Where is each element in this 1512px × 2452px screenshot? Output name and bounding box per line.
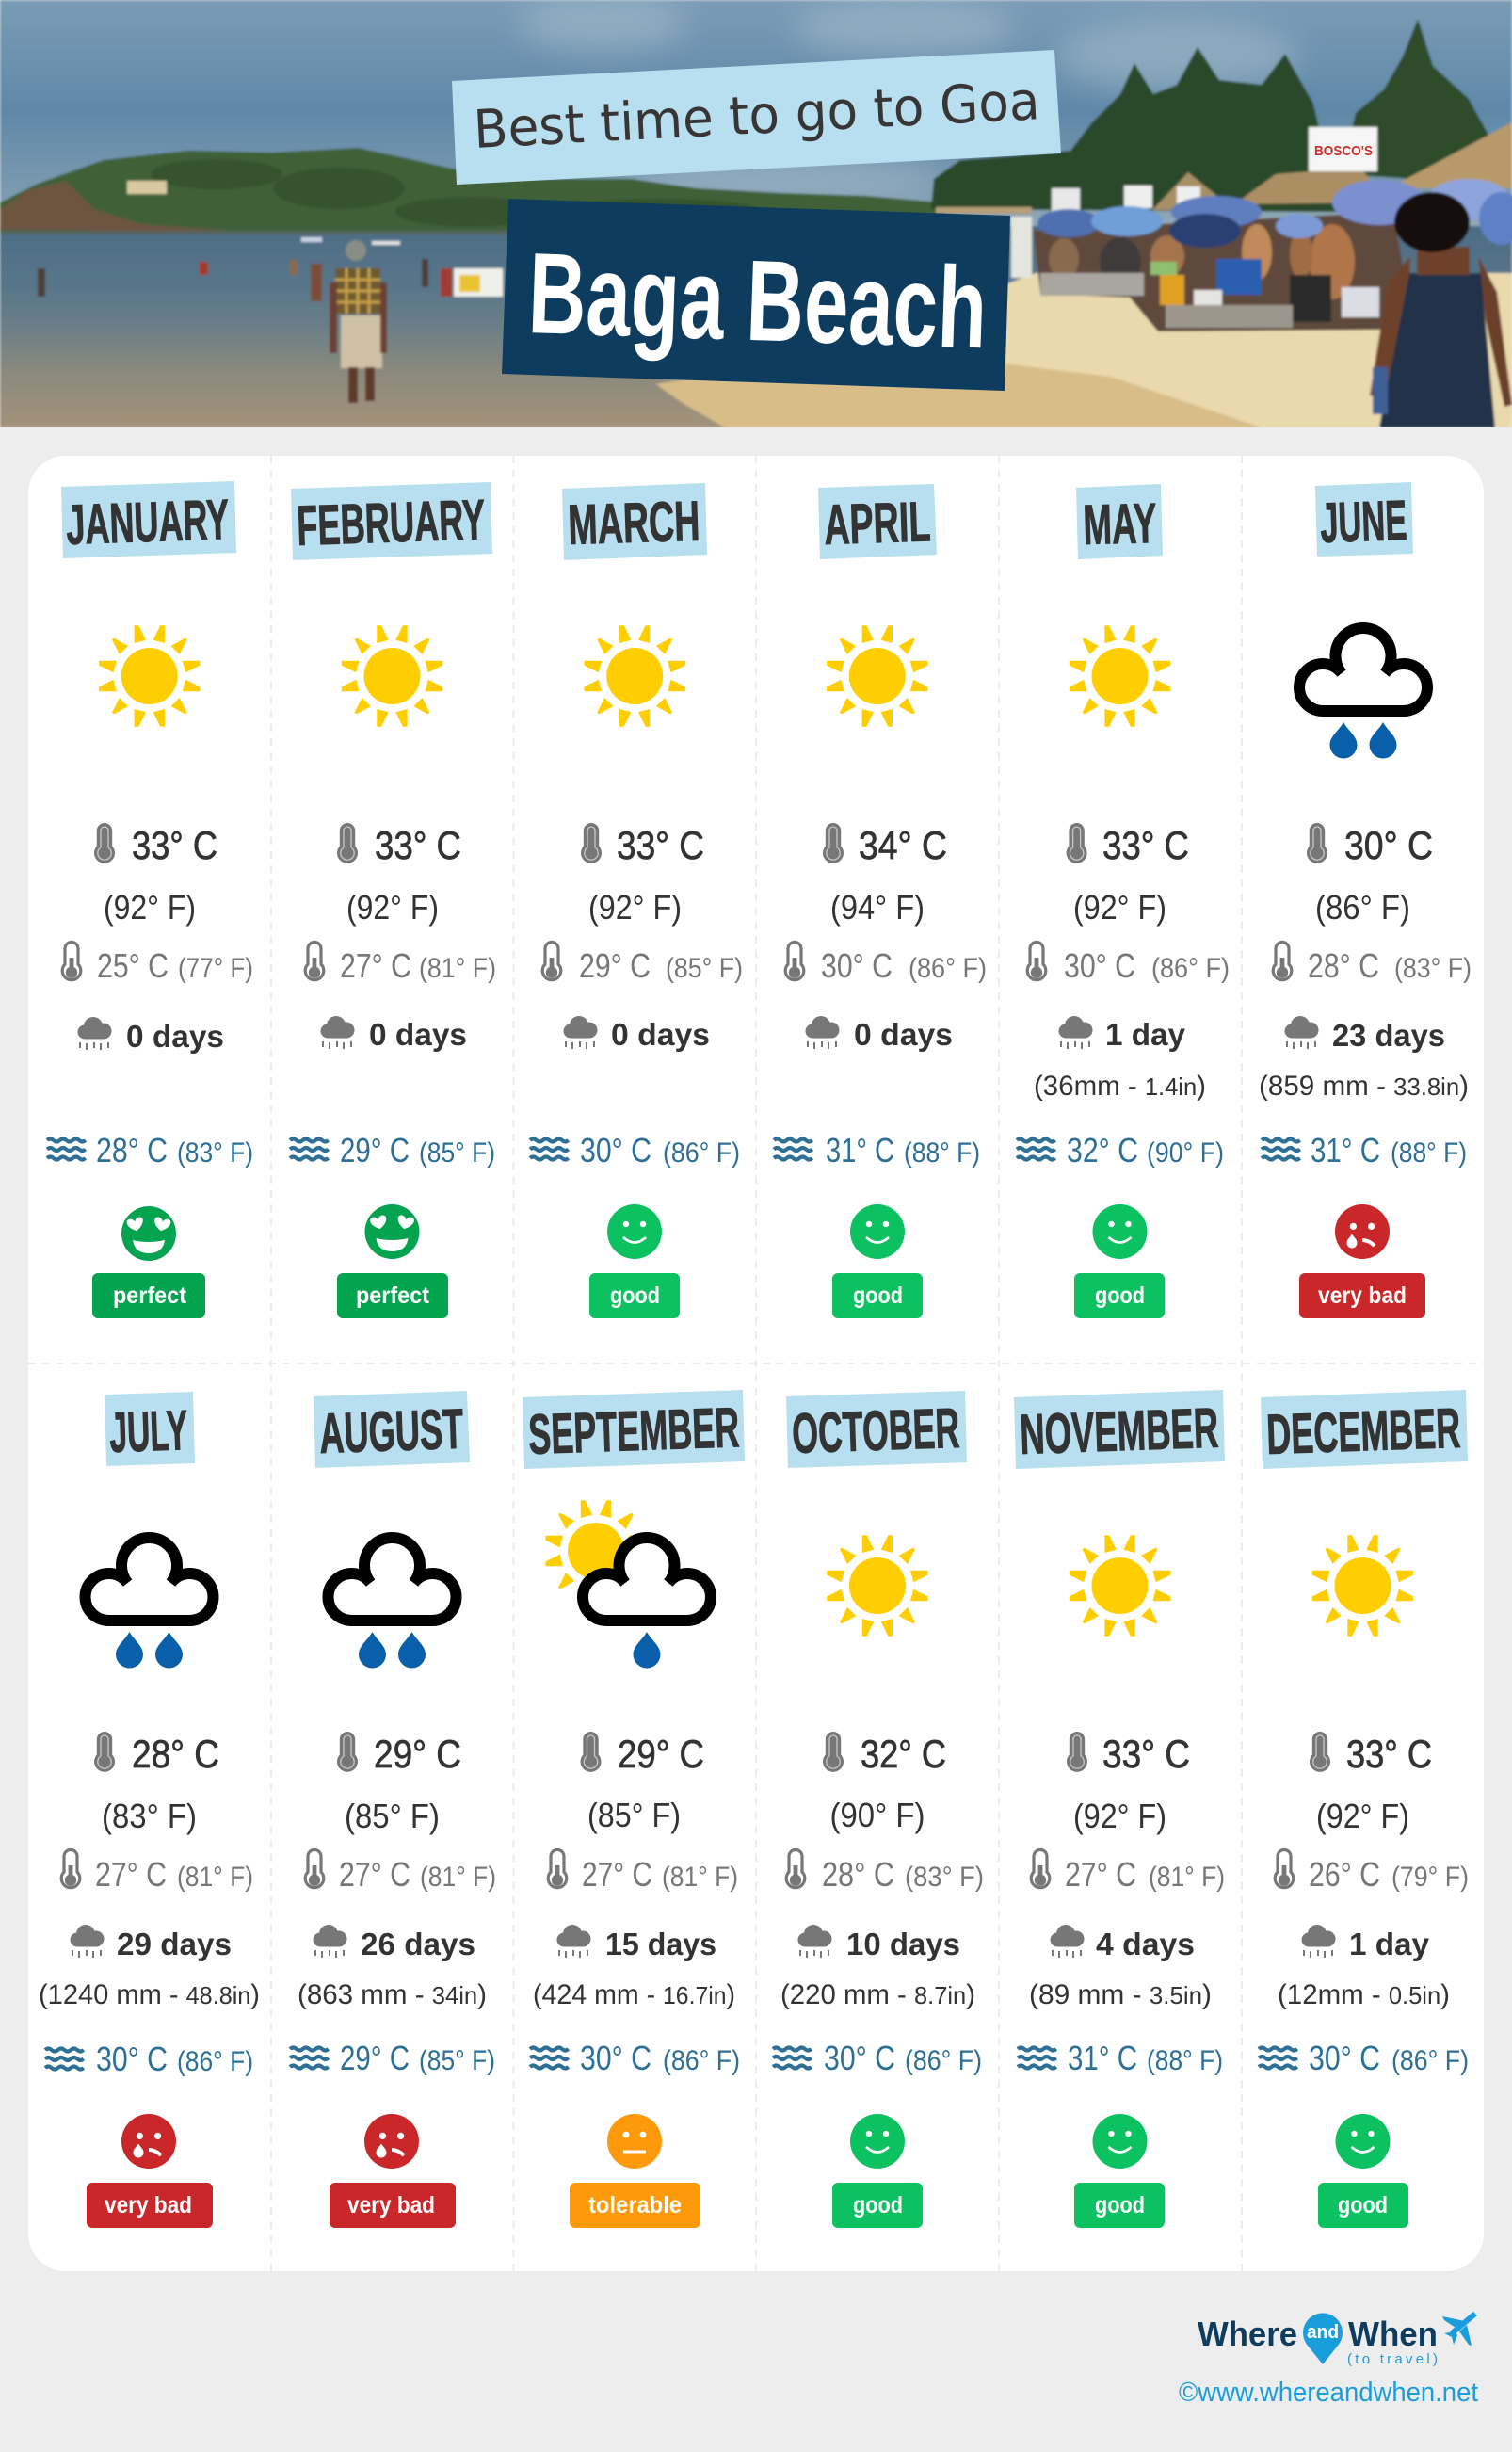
footer logo: Where and When: (to travel) [1347, 2351, 1438, 2367]
high temperature: (92° F) [1316, 1797, 1409, 1835]
rating: good [832, 2114, 923, 2228]
month label [1014, 1390, 1225, 1469]
sea temperature: 31° C [1311, 1131, 1380, 1170]
low temperature: 29° C [579, 946, 651, 985]
rating: perfect: perfect [113, 1282, 187, 1309]
sea temperature: 30° C [580, 1131, 651, 1170]
low temperature: 30° C [821, 946, 893, 985]
rainfall [533, 1925, 735, 2010]
hut roofs [1151, 171, 1218, 212]
rainfall [1278, 1925, 1450, 2010]
panel: December [1259, 1390, 1469, 2228]
sea temperature: 30° C [580, 2039, 651, 2077]
rating: very bad [330, 2114, 456, 2228]
sea temperature: (85° F) [419, 2045, 495, 2076]
sea temperature: 32° C [1067, 1131, 1138, 1170]
woman in the foreground [1370, 256, 1410, 399]
panel: April [774, 484, 987, 1318]
icon: sun [99, 625, 200, 727]
sea temperature [1262, 1131, 1467, 1170]
rating: perfect: perfect [356, 1282, 430, 1309]
low temperature: (81° F) [662, 1862, 738, 1893]
high temperature: (85° F) [587, 1796, 681, 1834]
panel: monthly calendar card [28, 456, 1484, 2271]
month label: MAY [1083, 492, 1157, 557]
icon: sun [827, 625, 928, 727]
sea temperature: 30° C [824, 2039, 895, 2077]
rating: very bad: very bad [1318, 1282, 1407, 1309]
rainfall: (859 mm - 33.8in) [1259, 1071, 1469, 1102]
high temperature: (92° F) [104, 888, 196, 927]
rainfall [1034, 1016, 1206, 1102]
low temperature: 27° C [339, 1855, 410, 1894]
high temperature: 30° C [1344, 823, 1433, 867]
man in the shallows [346, 240, 366, 261]
rainfall: (12mm - 0.5in) [1278, 1979, 1450, 2010]
rating: perfect [337, 1204, 448, 1318]
low temperature [785, 942, 987, 985]
low temperature: (85° F) [666, 953, 743, 984]
high temperature: 33° C [1102, 1732, 1190, 1776]
rating: good: good [1095, 1282, 1145, 1309]
sea temperature [1259, 2039, 1469, 2077]
sea temperature: (86° F) [663, 2045, 740, 2076]
sea temperature: 29° C [340, 1131, 410, 1170]
high temperature: 33° C [132, 823, 217, 867]
rating: perfect [92, 1206, 205, 1318]
icon: airplane [1442, 2314, 1475, 2346]
footer logo: Where and When: Where [1198, 2315, 1297, 2353]
rainfall [780, 1925, 975, 2010]
sea temperature [45, 2040, 253, 2078]
rating: good: good [1095, 2192, 1145, 2218]
rating: good: good [610, 1282, 660, 1309]
rating: very bad: very bad [347, 2192, 435, 2218]
panel: July [39, 1392, 260, 2228]
month label: FEBRUARY [296, 488, 486, 557]
panel: June [1259, 482, 1472, 1318]
rating: good [1074, 2114, 1165, 2228]
sea temperature: (86° F) [905, 2045, 982, 2076]
rainfall: (424 mm - 16.7in) [533, 1979, 735, 2010]
high temperature: (86° F) [1315, 888, 1410, 927]
month label [1315, 482, 1413, 557]
high temperature [337, 823, 461, 927]
icon: sun [827, 1535, 928, 1637]
rainfall: 1 day [1349, 1927, 1430, 1961]
high temperature: (92° F) [588, 888, 682, 927]
low temperature [305, 1849, 496, 1894]
sign text in photo: BOSCO'S [1314, 143, 1373, 159]
rainfall [77, 1017, 224, 1054]
panel: January [47, 481, 253, 1318]
rainfall: 0 days [611, 1017, 710, 1052]
title banner: Best time to go to Goa: Best time to go to Goa [472, 71, 1041, 161]
rating: good [1074, 1204, 1165, 1318]
month label [105, 1392, 195, 1466]
low temperature: (81° F) [419, 953, 496, 984]
rating: good [832, 1204, 923, 1318]
high temperature: 29° C [374, 1732, 461, 1776]
low temperature [305, 942, 496, 985]
rating: good: good [1338, 2192, 1388, 2218]
month label [523, 1390, 745, 1469]
sea temperature [1017, 1131, 1224, 1170]
high temperature: (92° F) [1073, 1797, 1166, 1835]
panel: March [530, 483, 743, 1318]
low temperature: (81° F) [1149, 1862, 1225, 1893]
rainfall [298, 1925, 487, 2010]
panel: September [523, 1390, 745, 2228]
rating: tolerable [570, 2114, 700, 2228]
sea temperature: (86° F) [1391, 2045, 1469, 2076]
rainfall: 29 days [117, 1927, 232, 1961]
month label [291, 482, 492, 560]
low temperature: 25° C [97, 946, 169, 985]
low temperature: 27° C [582, 1855, 652, 1894]
sea temperature: (86° F) [177, 2046, 253, 2077]
high temperature [1067, 1732, 1190, 1835]
high temperature [1067, 823, 1189, 927]
footer logo: Where and When: and [1307, 2322, 1339, 2343]
month label: MARCH [567, 490, 700, 557]
month label: AUGUST [318, 1397, 464, 1465]
sea temperature: (88° F) [1147, 2045, 1223, 2076]
rating: good [589, 1204, 680, 1318]
sea temperature: 31° C [1068, 2039, 1137, 2077]
month label [314, 1391, 470, 1468]
low temperature: (86° F) [1151, 953, 1230, 984]
low temperature [548, 1849, 738, 1894]
rainfall: (1240 mm - 48.8in) [39, 1979, 260, 2010]
month label: JANUARY [65, 488, 230, 557]
sea temperature [530, 2039, 740, 2077]
icon: sun [1312, 1535, 1413, 1637]
panel: May [1017, 484, 1230, 1318]
high temperature: (92° F) [346, 888, 439, 927]
icon: sun [584, 625, 685, 727]
high temperature [823, 823, 947, 927]
rating: good: good [853, 1282, 903, 1309]
rainfall [1029, 1925, 1212, 2010]
high temperature [94, 823, 217, 927]
rating: very bad [1299, 1204, 1425, 1318]
title banner: Baga Beach: Baga Beach [526, 229, 989, 372]
month label [562, 483, 707, 560]
low temperature: (79° F) [1391, 1862, 1469, 1893]
rainfall: 23 days [1332, 1018, 1445, 1053]
panel: August [290, 1391, 496, 2228]
trees [931, 47, 1337, 212]
icon: sun [342, 625, 442, 727]
rainfall: 4 days [1096, 1927, 1195, 1961]
low temperature: 27° C [1065, 1855, 1136, 1894]
high temperature [337, 1732, 461, 1835]
sea temperature [530, 1131, 740, 1170]
sea temperature: 30° C [96, 2040, 168, 2078]
title banner: Best time to go to Goa [452, 50, 1061, 185]
title banner: Baga Beach [502, 199, 1010, 391]
high temperature: (92° F) [1073, 888, 1166, 927]
high temperature: (83° F) [102, 1797, 197, 1835]
low temperature: 28° C [1308, 946, 1379, 985]
rainfall [563, 1016, 710, 1052]
high temperature [581, 823, 704, 927]
header photo: Baga Beach scene [0, 0, 1512, 427]
rainfall [39, 1925, 260, 2010]
rating: good: good [853, 2192, 903, 2218]
month label: JUNE [1319, 489, 1407, 555]
high temperature: 34° C [859, 823, 947, 867]
sea temperature: 30° C [1309, 2039, 1380, 2077]
low temperature [1273, 942, 1472, 985]
icon: sun [1070, 1535, 1170, 1637]
rainfall: 10 days [846, 1927, 960, 1961]
footer logo: Where and When [1198, 2313, 1475, 2367]
sea temperature: (85° F) [419, 1137, 495, 1169]
rainfall: 15 days [605, 1927, 716, 1961]
rainfall: (89 mm - 3.5in) [1029, 1979, 1212, 2010]
low temperature [1031, 1849, 1225, 1894]
icon: rain cloud with two drops [1299, 628, 1427, 759]
icon: map pin [1303, 2313, 1343, 2364]
sea temperature: (90° F) [1147, 1137, 1224, 1169]
icon: rain cloud with two drops [328, 1538, 456, 1669]
month label [61, 481, 236, 558]
low temperature: (83° F) [1394, 953, 1472, 984]
month label: SEPTEMBER [527, 1395, 740, 1466]
sea temperature: 31° C [826, 1131, 894, 1170]
rainfall [1259, 1016, 1469, 1102]
high temperature: (94° F) [830, 888, 925, 927]
sea temperature [290, 2039, 495, 2077]
low temperature: (81° F) [177, 1862, 253, 1893]
high temperature: 28° C [132, 1732, 219, 1776]
low temperature [62, 942, 253, 985]
month label: NOVEMBER [1019, 1396, 1219, 1466]
month label: APRIL [823, 490, 931, 557]
rainfall: 0 days [369, 1017, 467, 1052]
low temperature: 27° C [340, 946, 411, 985]
sea temperature: (86° F) [663, 1137, 740, 1169]
high temperature [94, 1732, 219, 1835]
high temperature: 29° C [618, 1732, 704, 1776]
month label [786, 1391, 967, 1468]
rainfall [320, 1016, 467, 1052]
high temperature [823, 1732, 946, 1834]
website credit: ©www.whereandwhen.net [1179, 2378, 1478, 2408]
sea temperature: 29° C [340, 2039, 410, 2077]
low temperature: 26° C [1309, 1855, 1380, 1894]
rainfall: (220 mm - 8.7in) [780, 1979, 975, 2010]
rainfall: (36mm - 1.4in) [1034, 1071, 1206, 1102]
month label [818, 484, 937, 559]
rainfall: 26 days [361, 1927, 475, 1961]
rainfall: (863 mm - 34in) [298, 1979, 487, 2010]
sea temperature [290, 1131, 495, 1170]
high temperature: 33° C [1346, 1732, 1432, 1776]
month label [1076, 484, 1163, 559]
sea temperature: (88° F) [1391, 1137, 1467, 1169]
sea temperature: (83° F) [177, 1137, 253, 1169]
low temperature: (81° F) [420, 1862, 496, 1893]
low temperature [786, 1849, 984, 1894]
sea temperature [47, 1131, 253, 1170]
high temperature: (90° F) [830, 1796, 925, 1834]
low temperature [61, 1849, 253, 1894]
panel: November [1014, 1390, 1225, 2228]
high temperature [580, 1732, 704, 1834]
month label: OCTOBER [791, 1396, 960, 1465]
icon: rain cloud with two drops [85, 1538, 213, 1669]
high temperature: 33° C [1102, 823, 1189, 867]
low temperature: 30° C [1064, 946, 1135, 985]
panel: October [773, 1391, 984, 2228]
low temperature: 28° C [822, 1855, 894, 1894]
high temperature [1307, 823, 1433, 927]
umbrellas [1037, 209, 1100, 237]
sea temperature [773, 2039, 982, 2077]
low temperature: (86° F) [909, 953, 987, 984]
rating: very bad: very bad [105, 2192, 192, 2218]
sea temperature [774, 1131, 980, 1170]
high temperature: 33° C [617, 823, 704, 867]
sea temperature: 28° C [96, 1131, 168, 1170]
low temperature: 27° C [95, 1855, 167, 1894]
high temperature: 32° C [861, 1732, 946, 1776]
month label: JULY [108, 1398, 188, 1464]
rating: very bad [87, 2114, 213, 2228]
footer logo: Where and When: When [1348, 2315, 1438, 2353]
low temperature [1027, 942, 1230, 985]
sea temperature: (88° F) [904, 1137, 980, 1169]
high temperature: 33° C [375, 823, 461, 867]
low temperature [1275, 1849, 1469, 1894]
panel: February [290, 482, 496, 1318]
sea temperature [1018, 2039, 1223, 2077]
rainfall: 0 days [126, 1019, 224, 1054]
crowd [1034, 212, 1412, 331]
rainfall: 0 days [854, 1017, 953, 1052]
icon: sun [1070, 625, 1170, 727]
low temperature [542, 942, 743, 985]
rating: tolerable: tolerable [588, 2192, 682, 2218]
high temperature [1310, 1732, 1432, 1835]
high temperature: (85° F) [345, 1797, 440, 1835]
rainfall [806, 1016, 953, 1052]
low temperature: (83° F) [905, 1862, 984, 1893]
rating: good [1318, 2114, 1408, 2228]
low temperature: (77° F) [178, 953, 253, 984]
rainfall: 1 day [1105, 1017, 1186, 1052]
icon: sun behind rain cloud with one drop [545, 1500, 711, 1669]
